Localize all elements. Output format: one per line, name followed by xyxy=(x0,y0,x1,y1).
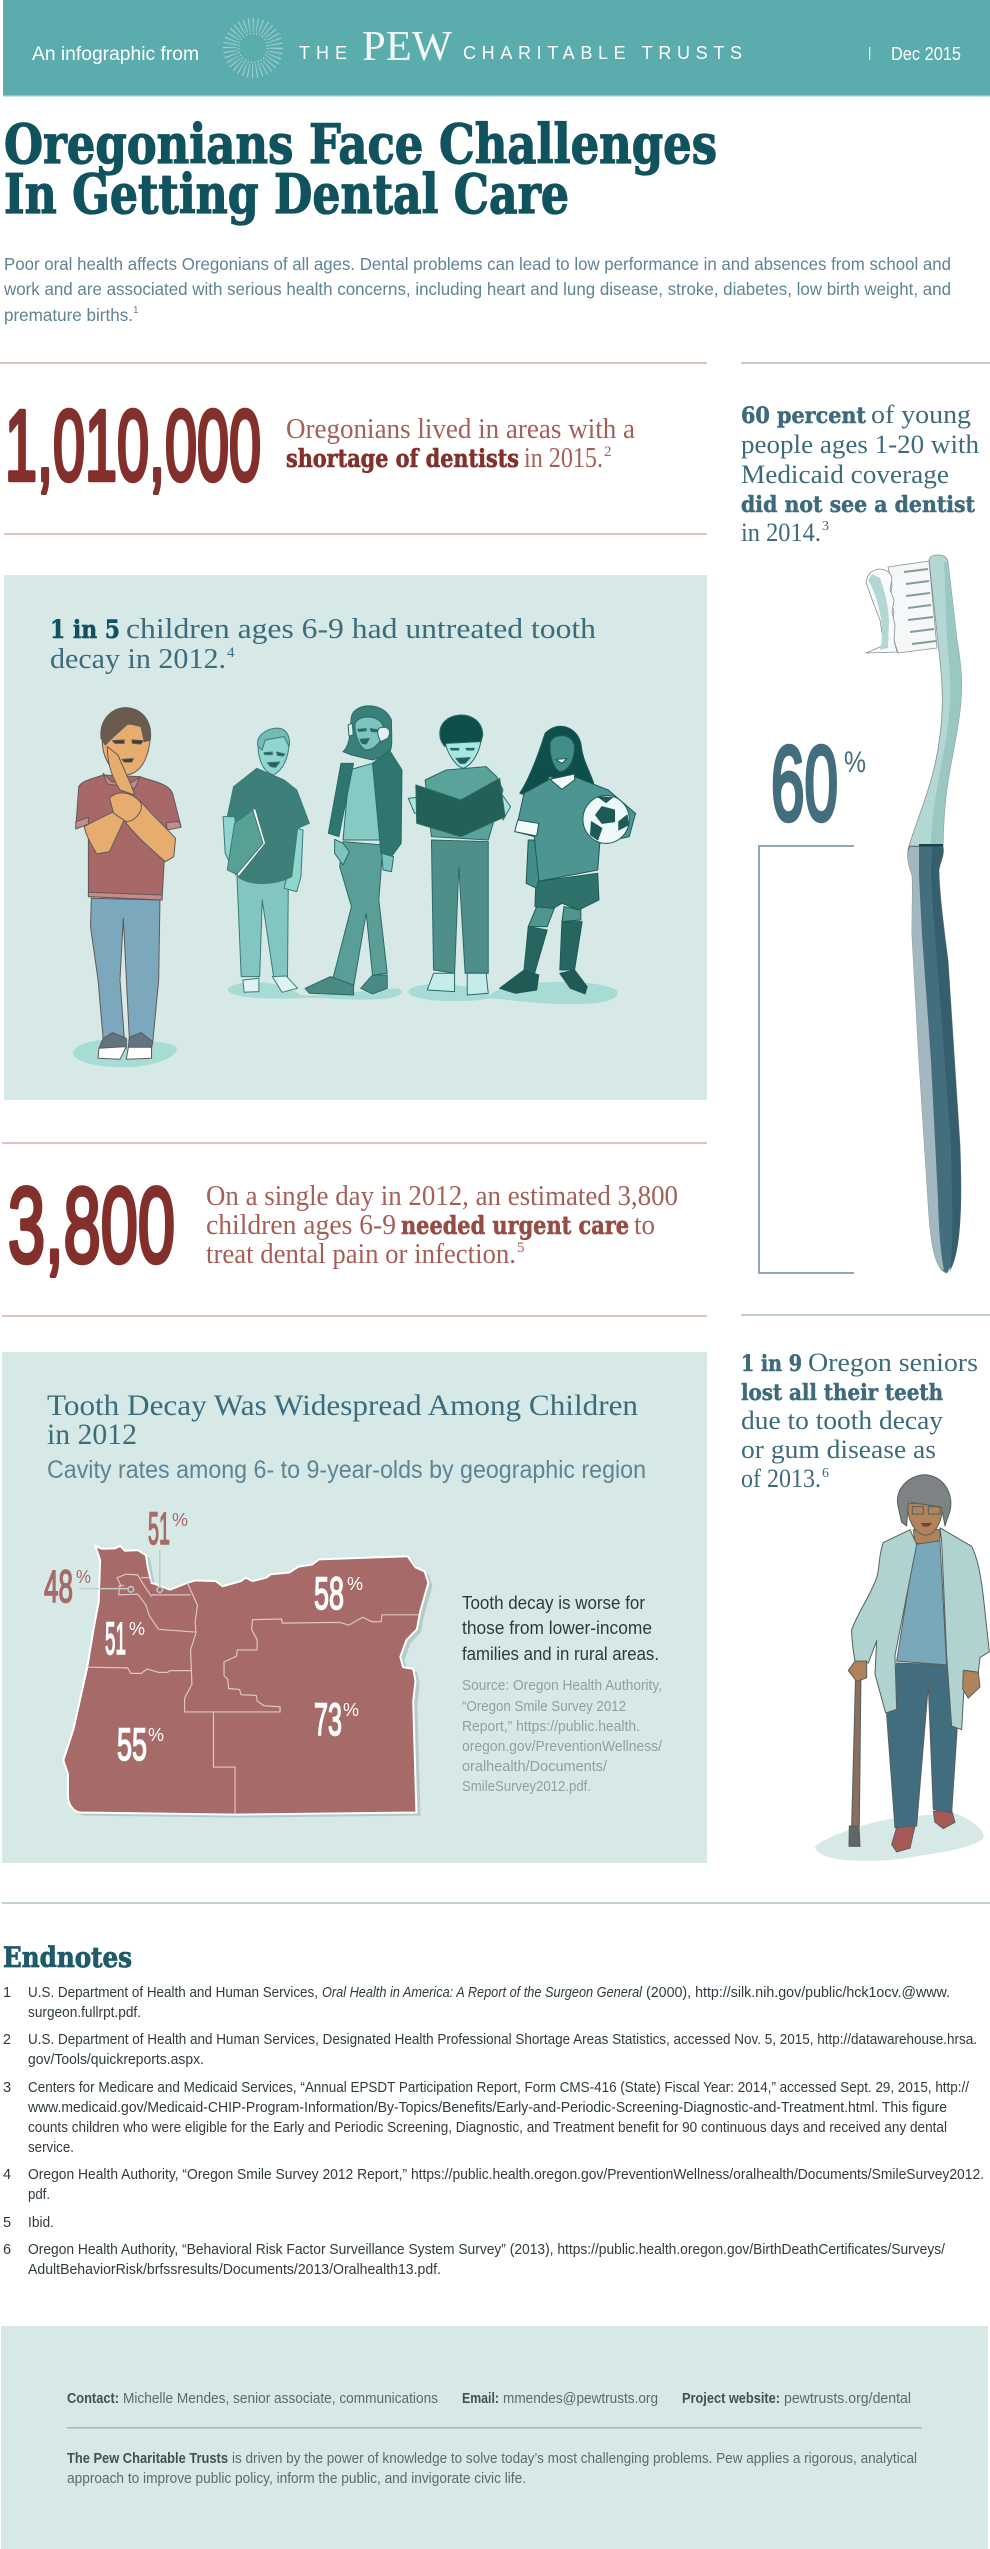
illustration: five children xyxy=(73,706,636,1067)
map heading xyxy=(47,1389,646,1484)
intro paragraph: work and are associated with serious health concerns, including heart and lung disease, stroke, diabetes, low birth weight, and xyxy=(3,279,951,299)
map source: Source: Oregon Health Authority, xyxy=(462,1677,662,1694)
map source xyxy=(462,1677,663,1795)
icon: Pew sunburst logo xyxy=(230,25,276,71)
illustration: senior woman with cane xyxy=(815,1475,989,1861)
intro paragraph: 1 xyxy=(133,305,139,316)
header date: Dec 2015 xyxy=(891,44,961,64)
map note: those from lower-income xyxy=(462,1618,652,1638)
map source: “Oregon Smile Survey 2012 xyxy=(462,1698,626,1715)
endnotes list: Oral Health in America: A Report of the Surgeon General xyxy=(322,1985,643,2001)
stat description: 5 xyxy=(517,1240,524,1256)
map note: families and in rural areas. xyxy=(462,1644,659,1664)
map value: 73 percent: 73 xyxy=(314,1694,342,1745)
map value: 73 percent: % xyxy=(343,1700,359,1720)
Pew logo wordmark: PEW xyxy=(362,24,452,70)
endnotes list xyxy=(3,1985,984,2278)
map value: 55 percent: % xyxy=(148,1725,164,1745)
endnotes list: Ibid. xyxy=(28,2215,54,2231)
footer panel xyxy=(1,2326,988,2549)
map value: 58 percent: % xyxy=(347,1574,363,1594)
title: Oregonians Face Challenges xyxy=(4,112,717,176)
stat: 3,800 xyxy=(8,1165,678,1285)
contact line: pewtrusts.org/dental xyxy=(784,2391,911,2407)
map value: 48 percent callout: % xyxy=(76,1567,91,1587)
map source: oregon.gov/PreventionWellness/ xyxy=(462,1738,663,1755)
endnotes list: AdultBehaviorRisk/brfssresults/Documents/2013/Oralhealth13.pdf. xyxy=(28,2262,441,2278)
60 percent figure: 60 xyxy=(771,725,838,843)
panel: cavity rates map xyxy=(2,1352,707,1863)
panel heading: 1 in 5 xyxy=(50,615,120,644)
contact line: Contact: xyxy=(67,2391,119,2407)
endnotes list: Oregon Health Authority, “Behavioral Risk Factor Surveillance System Survey” (2013), https://public.health.oregon.gov/BirthDeathCertificates/Surveys/ xyxy=(28,2242,946,2258)
map value: 55 percent: 55 xyxy=(117,1719,147,1770)
child reading a book xyxy=(408,715,511,995)
stat: 1 in 9 seniors text: 1 in 9 xyxy=(741,1351,802,1377)
panel heading: 4 xyxy=(227,645,235,661)
map source: SmileSurvey2012.pdf. xyxy=(462,1778,591,1795)
stat: 1 in 9 seniors text: 6 xyxy=(822,1466,829,1481)
about Pew text: The Pew Charitable Trusts xyxy=(67,2451,228,2467)
stat: 60 percent text: 60 percent xyxy=(741,403,867,429)
map source: Report,” https://public.health. xyxy=(462,1718,640,1735)
map of Oregon xyxy=(63,1546,432,1818)
intro paragraph: premature births. xyxy=(4,305,133,325)
map note xyxy=(462,1593,659,1664)
panel heading: decay in 2012. xyxy=(50,644,226,675)
child with backpack and books xyxy=(223,728,309,992)
endnotes list: 3 xyxy=(3,2080,11,2096)
map note: Tooth decay is worse for xyxy=(462,1593,645,1613)
map source: oralhealth/Documents/ xyxy=(462,1758,608,1775)
Pew logo wordmark: CHARITABLE TRUSTS xyxy=(463,43,742,63)
endnotes list: 2 xyxy=(3,2032,11,2048)
stat: 60 percent text: in 2014. xyxy=(741,518,821,547)
stat: 60 percent text: 3 xyxy=(822,519,829,534)
contact line: mmendes@pewtrusts.org xyxy=(503,2391,658,2407)
map heading: Cavity rates among 6- to 9-year-olds by geographic region xyxy=(47,1456,646,1484)
panel: untreated tooth decay in children xyxy=(4,575,707,1100)
about Pew text: is driven by the power of knowledge to solve today’s most challenging problems. Pew applies a rigorous, analytical xyxy=(232,2451,917,2467)
endnotes heading: Endnotes xyxy=(3,1941,132,1974)
stat description xyxy=(206,1181,678,1270)
panel heading: children ages 6-9 had untreated tooth xyxy=(126,614,596,645)
Pew logo wordmark xyxy=(299,24,742,70)
stat description: to xyxy=(634,1210,655,1241)
stat: 60 percent text: did not see a dentist xyxy=(741,492,976,518)
endnotes list: surgeon.fullrpt.pdf. xyxy=(28,2005,141,2021)
about Pew text: approach to improve public policy, inform the public, and invigorate civic life. xyxy=(67,2471,526,2487)
bracket showing 60 percent of toothbrush xyxy=(759,846,854,1273)
endnotes list: service. xyxy=(28,2140,74,2156)
intro paragraph xyxy=(3,254,951,325)
endnotes list: 1 xyxy=(3,1985,11,2001)
endnotes list: counts children who were eligible for the Early and Periodic Screening, Diagnostic, and Treatment benefit for 90 continuous days and received any dental xyxy=(28,2120,947,2136)
endnotes list: U.S. Department of Health and Human Services, xyxy=(28,1985,318,2001)
stat description: 2 xyxy=(604,444,612,460)
stat description: children ages 6-9 xyxy=(206,1210,396,1241)
child with soccer ball xyxy=(500,726,636,994)
map value: 51 percent: % xyxy=(129,1619,145,1639)
stat: 1 in 9 seniors text: or gum disease as xyxy=(741,1435,936,1464)
child with toothache xyxy=(76,708,181,1059)
contact line: Project website: xyxy=(682,2391,780,2407)
stat: 1 in 9 seniors text: of 2013. xyxy=(741,1464,821,1493)
endnotes list: www.medicaid.gov/Medicaid-CHIP-Program-Information/By-Topics/Benefits/Early-and-Periodic-Screening-Diagnostic-and-Treatment.html. This figure xyxy=(27,2100,947,2116)
endnotes list: pdf. xyxy=(28,2187,50,2203)
stat description xyxy=(286,414,636,474)
big number: 1,010,000 xyxy=(5,390,261,502)
intro paragraph: Poor oral health affects Oregonians of all ages. Dental problems can lead to low performance in and absences from school and xyxy=(4,254,951,274)
panel heading xyxy=(50,614,596,675)
stat description: treat dental pain or infection. xyxy=(206,1239,516,1270)
map heading: Tooth Decay Was Widespread Among Children xyxy=(47,1389,638,1422)
map value: 48 percent callout: 48 xyxy=(44,1561,73,1612)
map heading: in 2012 xyxy=(47,1418,137,1451)
stat: 1 in 9 seniors text xyxy=(741,1348,978,1493)
endnotes list: 5 xyxy=(3,2215,11,2231)
contact line xyxy=(67,2391,911,2407)
header intro text: An infographic from xyxy=(32,44,199,65)
stat: 1 in 9 seniors text: lost all their teeth xyxy=(741,1380,943,1406)
contact line: Email: xyxy=(462,2391,499,2407)
endnotes list: 4 xyxy=(3,2167,11,2183)
contact line: Michelle Mendes, senior associate, communications xyxy=(123,2391,438,2407)
endnotes list: 6 xyxy=(3,2242,11,2258)
stat: 60 percent text xyxy=(741,400,979,547)
title xyxy=(4,112,717,226)
map value: 51 percent callout: % xyxy=(172,1510,188,1530)
about Pew text xyxy=(67,2451,917,2487)
icon: toothbrush xyxy=(866,555,962,1273)
child with headphones xyxy=(305,706,402,995)
map value: 51 percent: 51 xyxy=(105,1613,126,1664)
floor shadows xyxy=(73,982,618,1067)
title: In Getting Dental Care xyxy=(4,162,569,226)
stat description: Oregonians lived in areas with a xyxy=(286,414,636,445)
stat: 60 percent text: of young xyxy=(871,400,971,429)
map value: 58 percent: 58 xyxy=(314,1568,344,1619)
stat: 1 in 9 seniors text: Oregon seniors xyxy=(808,1348,978,1377)
big number: 3,800 xyxy=(8,1165,175,1285)
endnotes list: gov/Tools/quickreports.aspx. xyxy=(28,2052,204,2068)
header band xyxy=(3,0,990,96)
stat: 60 percent text: people ages 1-20 with xyxy=(741,430,979,459)
stat description: in 2015. xyxy=(524,443,603,474)
stat: 60 percent text: Medicaid coverage xyxy=(741,460,949,489)
stat: 1,010,000 xyxy=(5,390,636,502)
Pew logo wordmark: THE xyxy=(299,43,347,63)
endnotes list: (2000), http://silk.nih.gov/public/hck1ocv.@www. xyxy=(646,1985,950,2001)
map value: 51 percent callout: 51 xyxy=(148,1503,170,1554)
stat description: needed urgent care xyxy=(401,1211,629,1240)
stat description: shortage of dentists xyxy=(286,444,519,473)
stat: 1 in 9 seniors text: due to tooth decay xyxy=(741,1406,943,1435)
60 percent figure: % xyxy=(844,746,866,779)
stat description: On a single day in 2012, an estimated 3,800 xyxy=(206,1181,678,1212)
